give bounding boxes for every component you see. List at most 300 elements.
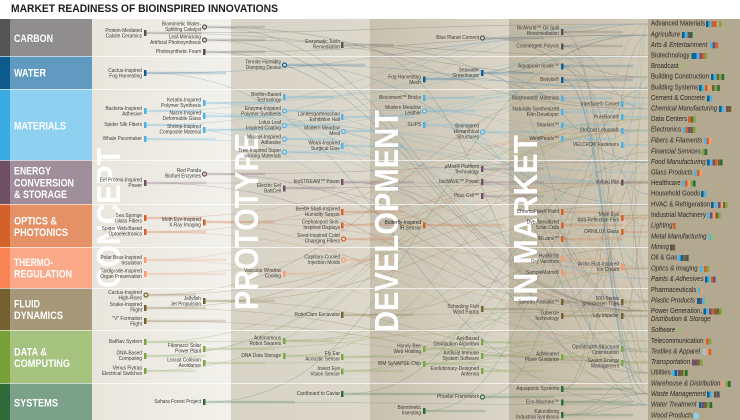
Power: Power Generation,: [651, 308, 702, 315]
Moth eye x-ray: X-Ray Imaging: [169, 222, 201, 229]
V formation: [112, 316, 146, 328]
Electronics: Electronics: [651, 126, 682, 134]
Capillary: [304, 254, 346, 266]
Butterfly: Butterfly-Inspired: [385, 220, 421, 226]
Cement: Cement & Concrete: [651, 95, 705, 102]
Broadcast: Broadcast: [651, 62, 679, 70]
innovations: prototype column 1: [238, 59, 286, 359]
Shrimp: Composite Material: [159, 129, 201, 136]
Whale pacemaker: Whale Pacemaker: [103, 136, 142, 142]
category: fluid: [0, 289, 92, 330]
Tubercle: Technology: [535, 316, 559, 322]
Evolutionary: Antenna: [461, 371, 479, 378]
category: data: COMPUTING: [14, 358, 70, 370]
category: materials: MATERIALS: [14, 120, 66, 132]
Bacteria adhesive: [106, 106, 146, 118]
Mussel: [247, 134, 286, 146]
Tardigrade: [100, 268, 146, 280]
Cactus high-rises: High-Rises: [118, 295, 142, 302]
Chemical: Chemical Manufacturing: [651, 105, 717, 113]
Bioinspired structures: [454, 123, 484, 141]
Polar bear: Polar Bear-Inspired: [100, 255, 142, 261]
Electric eel: [257, 183, 286, 195]
Tree-inspired: [238, 148, 286, 160]
Lotus: Inspired Coating: [246, 125, 281, 132]
Telecom: Telecommunication: [651, 338, 704, 345]
Lily: Lily Impeller: [593, 313, 619, 319]
Interface: Interface® Carpet: [581, 100, 620, 108]
category: optics: OPTICS &: [14, 215, 57, 227]
SLIPS: SLIPS: [407, 122, 421, 128]
Red panda: [165, 168, 206, 180]
Leather: Modern Meadow: [385, 105, 421, 111]
Vascular window: Cooling: [265, 273, 281, 280]
Moth eye x-ray: [162, 217, 206, 229]
Kalundborg: [516, 409, 564, 420]
innovations: development column 1: [378, 74, 426, 417]
Building Systems: [651, 84, 720, 92]
Cephalopod: Inspired Displays: [303, 225, 340, 231]
Bacteria adhesive: Bacteria-Inspired: [106, 106, 142, 112]
connection stubs: [146, 27, 648, 415]
Immune: System Software: [443, 356, 479, 362]
Waste: Waste Management: [651, 391, 707, 398]
Building Systems: Building Systems: [651, 84, 699, 92]
Lighting: Lighting: [651, 222, 673, 230]
Agriculture: Agriculture: [650, 31, 680, 39]
category: thermo: THERMO-: [14, 257, 53, 269]
category: thermo: [0, 248, 92, 288]
Evolutionary: Evolutionary-Designed: [431, 366, 479, 372]
Utilities: Utilities: [651, 369, 671, 377]
category: water: WATER: [14, 68, 46, 80]
category: energy: & STORAGE: [14, 189, 67, 201]
Fibonacci: [168, 343, 206, 355]
Utilities: [651, 369, 688, 377]
Robot swarms: Robot Swarms: [249, 341, 281, 347]
BioWorld: BioWorld™ Oil Spill: [517, 25, 559, 32]
Snake flight: [110, 302, 146, 314]
industries list: [650, 20, 731, 420]
Capillary: Capillary-Cooled: [304, 254, 340, 261]
uMist: Technology: [455, 169, 479, 176]
Tree-inspired: wicking Materials: [243, 153, 281, 160]
Cephalopod: [302, 219, 344, 231]
BioWorld: Bioremediation: [527, 31, 559, 37]
ChromaFlair: ChromaFlair® Paint: [517, 208, 560, 215]
DNA storage: DNA Data Storage: [241, 353, 281, 359]
BatNav: BatNav System: [109, 339, 143, 345]
innovations: concept column 1: [100, 28, 148, 377]
Eel protein: Power: [128, 183, 142, 189]
Water splitting: Biomimetic Water-: [162, 21, 201, 28]
V formation: Flight: [130, 321, 143, 328]
Leaf-mimicking: Leaf-Mimicking: [169, 34, 201, 41]
Nacre: Nacre-Inspired: [169, 110, 201, 117]
Vascular window: [244, 268, 286, 280]
Enzyme: Enzyme-Inspired: [245, 106, 281, 112]
DNA computing: DNA-Based: [117, 350, 142, 357]
Red panda: Red Panda: [177, 168, 201, 174]
Cosmerge: Cosmerge® Polyols: [516, 42, 559, 50]
Biomimetic investing: [397, 405, 426, 417]
Advanced Materials: Advanced Materials: [651, 20, 705, 28]
Moth eye x-ray: Moth Eye-Inspired: [162, 217, 201, 223]
Mining: Mining: [651, 244, 669, 251]
Mussel: Mussel-Inspired: [247, 134, 281, 141]
Healthcare: Healthcare: [651, 180, 681, 187]
Seed: Changing Fibers: [305, 238, 340, 245]
Fibonacci: Power Plant: [175, 348, 202, 355]
Sea sponge: Sea Sponge: [116, 213, 142, 219]
Leaf-mimicking: Artificial Photosynthesis: [150, 40, 201, 46]
Financial: Financial Services: [651, 148, 701, 156]
Biofilm: Technology: [257, 97, 281, 104]
OptiStruct: [572, 343, 624, 356]
category: carbon: CARBON: [14, 33, 53, 45]
Nacre: Deformable Glass: [162, 116, 201, 122]
HydRIS: HydRIS®: [539, 252, 559, 260]
Worm glue: Surgical Glue: [311, 146, 340, 152]
Protein-Mediated: [105, 28, 146, 40]
Moth eye film: Anti-Reflective Film: [578, 217, 620, 224]
Lotus: [246, 120, 286, 132]
HydRIS: [531, 252, 564, 265]
OptiStruct: OptiStruct® Structural: [572, 343, 619, 351]
innovations: in market column 2: [572, 100, 624, 370]
innovations: prototype column 2: [294, 39, 346, 397]
Tubercle: [535, 310, 564, 322]
Keratin: Keratin-Inspired: [167, 97, 201, 104]
Glass: Glass Products: [651, 169, 693, 177]
Photosynthetic foam: Photosynthetic Foam: [156, 49, 202, 55]
Sea sponge: Glass Fibers: [115, 218, 142, 225]
Worm glue: Worm-Inspired: [308, 140, 340, 147]
WindPearls: WindPearls™: [530, 136, 559, 142]
Food: Food Manufacturing: [651, 159, 706, 166]
Seawater: Greenhouse: [453, 73, 479, 79]
Power: [651, 308, 722, 323]
Electronics: [651, 126, 696, 134]
innovations: development column 2: [431, 35, 484, 400]
Biotechnology: Biotechnology: [651, 52, 690, 60]
Swarm energy: [587, 358, 624, 370]
Pharmaceuticals: Pharmaceuticals: [651, 287, 697, 294]
Pilus: Pilus Cell™: [454, 193, 479, 199]
Dye-sensitized: Dye-Sensitized: [527, 219, 559, 226]
Capillary: Injection Molds: [308, 260, 340, 266]
Eco-machine: Eco-Machine™: [526, 399, 559, 406]
SyNAPSE: IBM SyNAPSE Chip: [378, 361, 421, 367]
Dye-sensitized: Solar Cells: [536, 225, 559, 231]
Eel protein: Eel Protein-Inspired: [100, 177, 142, 184]
Schooling fish: [447, 304, 484, 316]
Biofilm: [251, 92, 286, 104]
Swarm energy: Management: [591, 363, 620, 370]
category: data: [0, 331, 92, 383]
Cactus high-rises: Cactus-Inspired: [108, 290, 142, 296]
Plane guidance: AdMinated: [536, 351, 559, 358]
Venus flytrap: Electrical Switches: [102, 371, 142, 377]
Spider silk: Spider Silk Fibers: [104, 122, 142, 128]
Termite: Damping Device: [246, 65, 281, 71]
Tubercle: Tubercle: [540, 310, 559, 317]
Seed: [297, 233, 346, 245]
category: optics: PHOTONICS: [14, 227, 68, 239]
uMist: [445, 163, 484, 176]
PureBond: PureBond®: [594, 113, 619, 121]
Termite: [245, 59, 286, 71]
bioSTREAM: bioSTREAM™ Power: [294, 179, 340, 185]
title: MARKET READINESS OF BIOINSPIRED INNOVATIONS: [11, 3, 278, 15]
Fibers: Fibers & Filaments: [651, 137, 703, 145]
Biolytix: [540, 76, 564, 83]
Ant-based: Distribution Algorithm: [434, 341, 480, 348]
Jellyfish: Jet Propulsion: [170, 301, 201, 308]
Plastic: Plastic Products: [651, 297, 696, 305]
Voltaic: Voltaic Pile: [595, 179, 619, 186]
Sea sponge: [115, 213, 146, 225]
Warehouse: Warehouse & Distribution: [651, 380, 721, 388]
IRLams: IRLams™: [538, 236, 559, 242]
Beetle: Humidity Sensor: [305, 212, 340, 218]
Red panda: Biofuel Enzymes: [165, 173, 201, 180]
Textiles: Textiles & Apparel: [651, 348, 700, 356]
Enzyme: Polymer Synthesis: [241, 111, 281, 118]
Keratin: Polymer Synthesis: [161, 103, 201, 109]
row dividers: [92, 56, 648, 384]
BioWorld: [517, 25, 564, 37]
stage label: prototype: PROTOTYPE: [228, 133, 265, 310]
Spider web: Spider Web-Based: [102, 226, 142, 232]
Water treatment: Water Treatment: [651, 401, 697, 409]
innovations: concept column 2: [150, 21, 206, 405]
Water splitting: [162, 21, 206, 33]
Oil: [651, 254, 689, 262]
Modern Meadow meat: Meat: [329, 131, 341, 137]
Cactus high-rises: [108, 290, 148, 302]
Bioinspired structures: Bioinspired: [455, 123, 479, 130]
Locust: Avoidance: [179, 363, 201, 369]
Cactus fog: Cactus-Inspired: [108, 68, 142, 74]
Moth eye film: Moth Eye: [599, 212, 619, 218]
Nacre: [162, 110, 206, 122]
Jellyfish: Jellyfish: [184, 296, 201, 302]
HVAC: HVAC & Refrigeration: [651, 201, 710, 209]
Power: Distribution & Storage: [651, 316, 711, 323]
Industrial: Industrial Machinery: [651, 212, 706, 219]
Shinkansen: [582, 296, 624, 308]
Jellyfish: [170, 296, 206, 308]
Oil: Oil & Gas: [651, 254, 678, 262]
Protein-Mediated: Calcite Ceramics: [106, 33, 142, 40]
Honey bee: Web Hosting: [393, 349, 421, 355]
Snake flight: Flight: [130, 307, 143, 314]
Paints: Paints & Adhesives: [651, 276, 704, 283]
SampleMatrix: SampleMatrix®: [526, 269, 559, 276]
Robot swarms: Autonomous: [254, 335, 281, 342]
Blue Planet: Blue Planet Cement: [436, 35, 480, 41]
HydRIS: Dry Vaccines: [531, 259, 559, 265]
Locust: [167, 357, 206, 369]
Ornilux: ORNILUX Glass: [584, 229, 619, 235]
Shrimp: [159, 124, 206, 136]
Leather: [385, 105, 426, 117]
Moth eye film: [578, 212, 624, 224]
Immune: Artificial Immune: [443, 350, 479, 357]
Spider web: Optoelectronics: [109, 231, 142, 238]
stage label: development: DEVELOPMENT: [368, 110, 405, 332]
Spider web: [102, 226, 146, 238]
DNA computing: Computing: [119, 356, 142, 362]
Aquaponic: Aquaponic Systems: [516, 386, 559, 392]
Landesgartenschau: Exhibition Hall: [309, 117, 340, 123]
Landesgartenschau: [298, 111, 344, 123]
category: energy: [0, 161, 92, 204]
Cactus fog: [108, 68, 146, 80]
Shinkansen: 500-Series: [596, 296, 619, 302]
Transportation: Transportation: [651, 359, 690, 366]
category: carbon: [0, 19, 92, 56]
Butterfly: [385, 220, 426, 232]
DNA computing: [117, 350, 146, 362]
Speedo: Speedo Fastskin™: [518, 299, 559, 306]
category: fluid: DYNAMICS: [14, 310, 63, 322]
Fly ear: Fly Ear: [325, 351, 340, 357]
category: energy: ENERGY: [14, 166, 51, 178]
Enzyme: [241, 106, 286, 118]
Dye-sensitized: [527, 219, 564, 231]
Fog mesh: [388, 74, 426, 86]
Cephalopod: Cephalopod Skin-: [302, 219, 340, 226]
Biocement: Biocement™ Bricks: [379, 95, 421, 101]
Film developer: [512, 106, 564, 118]
OptiStruct: Optimization: [592, 350, 619, 356]
Schooling fish: Wind Farms: [453, 309, 479, 316]
category: materials: [0, 90, 92, 160]
Polar bear: [100, 255, 146, 267]
Beetle: [296, 206, 344, 218]
category: optics: [0, 205, 92, 247]
Landesgartenschau: Landesgartenschau: [298, 111, 340, 118]
category: data: DATA &: [14, 346, 47, 358]
Aquaporin: Aquaporin Inside™: [518, 63, 559, 70]
category: thermo: REGULATION: [14, 268, 72, 280]
innovations: in market column 1: [512, 25, 564, 420]
Building Construction: Building Construction: [651, 73, 709, 81]
uMist: µMist® Platform: [445, 163, 480, 170]
Seawater: Seawater: [459, 67, 479, 74]
Fog mesh: Fog Harvesting: [388, 74, 421, 81]
Beetle: Beetle Shell-Inspired: [296, 206, 340, 213]
Modern Meadow meat: [304, 125, 346, 137]
Immune: [443, 350, 484, 362]
Insect eye: Vision Sensor: [310, 371, 340, 378]
Software: Software: [651, 327, 675, 334]
category: fluid: FLUID: [14, 298, 40, 310]
bioWAVE: bioWAVE™ Power: [439, 179, 479, 185]
Termite: Termite Humidity: [245, 59, 281, 66]
Household: Household Goods: [651, 190, 701, 198]
Cactus fog: Fog Harvesting: [109, 73, 142, 80]
Agriculture: [650, 31, 693, 39]
Ant-based: [434, 336, 484, 348]
Leather: Leather: [405, 110, 421, 117]
Vascular window: Vascular Window: [244, 268, 281, 274]
Optics: Optics & Imaging: [651, 265, 698, 273]
Bioinspired structures: Hierarchical: [454, 129, 479, 135]
Leaf-mimicking: [150, 34, 206, 46]
stage label: concept: CONCEPT: [90, 148, 127, 288]
Wood: Wood Products: [651, 412, 693, 420]
Keratin: [161, 97, 206, 109]
Lotus: Lotus Leaf: [259, 120, 282, 126]
Worm glue: [308, 140, 344, 152]
Evolutionary: [431, 366, 484, 378]
category: systems: SYSTEMS: [14, 398, 58, 410]
Sharklet: Sharklet™: [536, 122, 559, 129]
Kalundborg: Kalundborg: [534, 409, 559, 415]
Enzymatic toxin: Remediation: [313, 44, 340, 51]
Seawater: [453, 67, 484, 79]
Insect eye: [310, 366, 344, 378]
Seed: Seed-Inspired Color: [297, 233, 340, 239]
Bioinspired structures: Structures: [457, 134, 479, 141]
Shrimp: Shrimp-Inspired: [167, 124, 201, 130]
Protein-Mediated: Protein-Mediated: [105, 28, 142, 34]
Biofilm: Biofilm-Based: [251, 92, 281, 98]
Plane guidance: [525, 351, 564, 363]
Mussel: Adhesive: [261, 140, 281, 146]
Cardboard: Cardboard to Caviar: [297, 391, 340, 397]
Honey bee: [393, 343, 426, 355]
Snake flight: Snake-Inspired: [110, 302, 142, 308]
Fog mesh: Mesh: [409, 80, 421, 86]
Arctic fish: Arctic Fish-Inspired: [578, 261, 619, 268]
Film developer: Film Developer: [527, 112, 559, 118]
Robot swarms: [249, 335, 286, 347]
Polar bear: Insulation: [121, 260, 142, 267]
Metal: Metal Manufacturing: [651, 233, 707, 241]
Enzymatic toxin: Enzymatic Toxin: [305, 39, 340, 45]
category: systems: [0, 384, 92, 420]
Fibonacci: Fibonacci Solar: [168, 343, 201, 349]
Biotechnology: [651, 52, 707, 60]
Biolytix: Biolytix®: [540, 76, 559, 83]
stage label: in market: IN MARKET: [507, 135, 544, 303]
Bacteria adhesive: Adhesive: [122, 111, 142, 118]
Venus flytrap: [102, 365, 146, 377]
Locust: Locust Collision: [167, 357, 201, 364]
Biomimetic investing: Investing: [402, 410, 421, 417]
Phoebe: Phoebe Framework: [437, 394, 479, 400]
Fly ear: Acoustic Sensor: [305, 356, 340, 363]
connection curves: [146, 24, 648, 415]
Electric eel: BattCell: [264, 188, 281, 195]
Tree-inspired: Tree-Inspired Super: [238, 148, 281, 154]
Water splitting: Splitting Catalyst: [165, 27, 202, 33]
category: water: [0, 57, 92, 89]
StoCoat: StoCoat Lotusan®: [580, 126, 619, 134]
Ant-based: Ant-Based: [457, 336, 479, 342]
Arctic fish: Ice Cream: [597, 267, 620, 273]
Mushroom: Mushroom® Materials: [512, 94, 559, 102]
Swarm energy: Swarm Energy: [587, 358, 619, 364]
Plane guidance: Plane Guidance: [525, 357, 559, 363]
Tardigrade: Tardigrade-Inspired: [100, 268, 142, 275]
Insect eye: Insect Eye: [318, 366, 340, 372]
Arctic fish: [578, 261, 624, 273]
